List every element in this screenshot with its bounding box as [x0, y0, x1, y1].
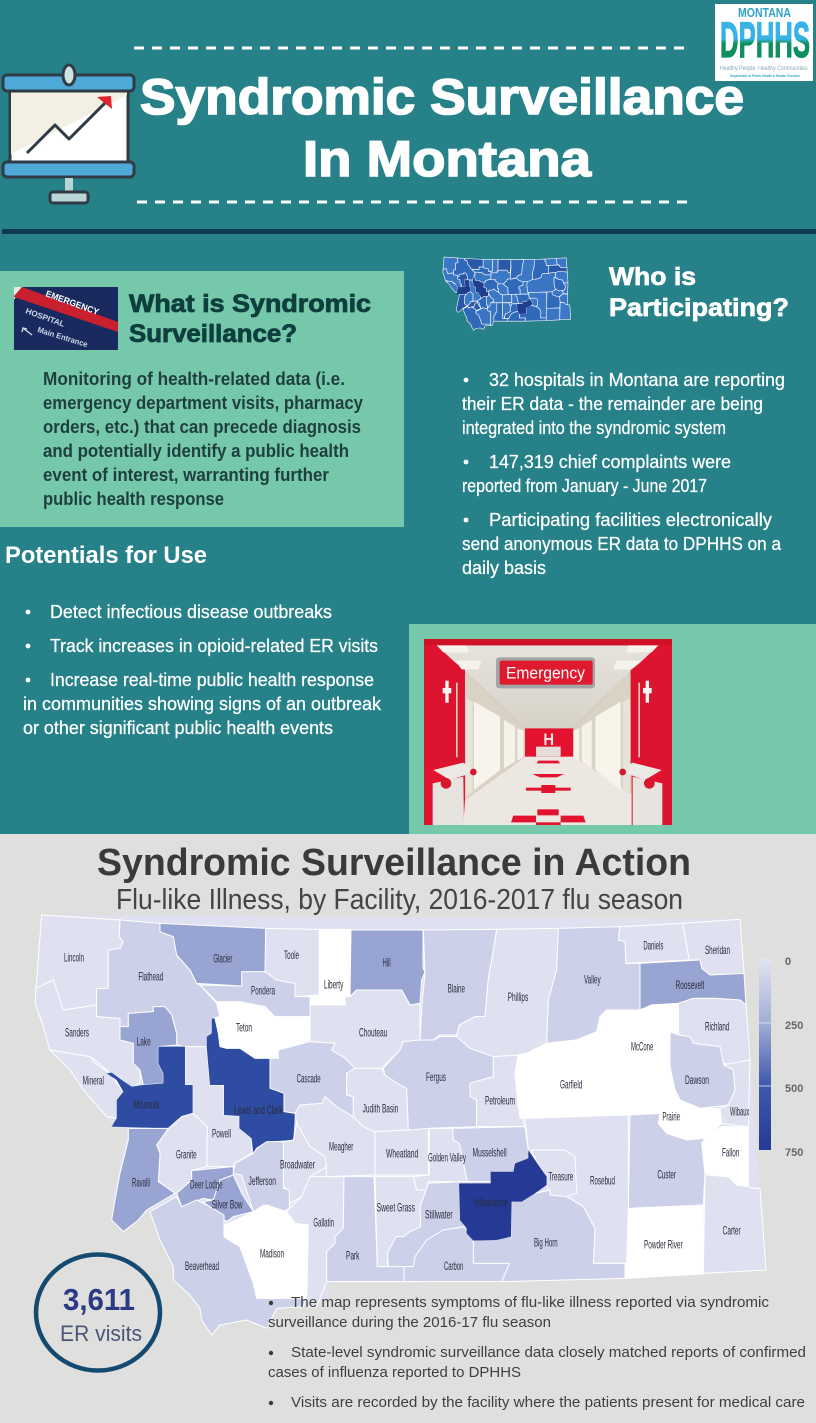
potentials bullets: or other significant public health events: [23, 718, 333, 738]
county labels: Glacier: [213, 953, 232, 966]
county labels: Liberty: [324, 979, 343, 992]
county labels: Richland: [705, 1021, 729, 1034]
definition text: event of interest, warranting further: [43, 465, 329, 485]
panel: emergency photo background: [409, 624, 816, 834]
county labels: Garfield: [560, 1079, 582, 1092]
county labels: Prairie: [662, 1111, 680, 1124]
map legend: 250: [785, 1020, 803, 1032]
county labels: Ravalli: [132, 1177, 150, 1190]
county labels: Valley: [584, 973, 601, 986]
title: [140, 69, 744, 187]
county labels: [64, 939, 749, 1273]
definition text: public health response: [43, 489, 224, 509]
county labels: Gallatin: [313, 1217, 334, 1230]
participation bullets: 32 hospitals in Montana are reporting: [489, 370, 785, 390]
logo: Montana DPHHS: [715, 4, 813, 81]
callout: 3,611 ER visits: ER visits: [60, 1321, 142, 1346]
county labels: Carter: [723, 1224, 741, 1237]
county labels: Granite: [176, 1148, 197, 1161]
participation bullets: reported from January - June 2017: [462, 476, 707, 496]
heading: what is syndromic surveillance: Surveillance?: [129, 320, 297, 348]
county labels: Wheatland: [386, 1148, 418, 1161]
heading: who is participating: Who is: [609, 263, 696, 291]
map notes bullets: surveillance during the 2016-17 flu season: [268, 1314, 551, 1331]
county labels: Deer Lodge: [190, 1178, 223, 1191]
county labels: Pondera: [251, 985, 275, 998]
definition text: [43, 369, 363, 509]
potentials bullets: [23, 602, 382, 738]
map legend: 500: [785, 1083, 803, 1095]
icon: presentation board with rising arrow: [3, 65, 134, 203]
heading: potentials for use: Potentials for Use: [5, 542, 207, 569]
callout: 3,611 ER visits: 3,611: [63, 1282, 135, 1317]
panel: what is syndromic surveillance: [0, 271, 404, 527]
county labels: Fallon: [722, 1147, 739, 1160]
participation bullets: integrated into the syndromic system: [462, 418, 726, 438]
participation bullets: their ER data - the remainder are being: [462, 394, 763, 414]
county labels: Lewis and Clark: [234, 1104, 283, 1117]
county labels: Jefferson: [248, 1175, 276, 1188]
heading: who is participating: [609, 263, 789, 322]
definition text: Monitoring of health-related data (i.e.: [43, 369, 345, 389]
county labels: Petroleum: [485, 1094, 515, 1107]
heading: who is participating: Participating?: [609, 294, 789, 322]
county labels: Missoula: [133, 1098, 160, 1111]
county labels: Toole: [284, 949, 299, 962]
choropleth map: Montana counties: [35, 915, 766, 1335]
choropleth map: Montana counties: Wibaux: [730, 1106, 749, 1119]
image: hospital emergency sign: EMERGENCY: [44, 288, 100, 317]
section subheading: Flu-like Illness, by Facility, 2016-2017 flu season: [116, 884, 683, 916]
heading: what is syndromic surveillance: [129, 290, 371, 348]
county labels: Stillwater: [425, 1208, 453, 1221]
county labels: Silver Bow: [212, 1198, 243, 1211]
county labels: Chouteau: [359, 1027, 387, 1040]
county labels: McCone: [631, 1041, 653, 1054]
section background: gray map area: [0, 834, 816, 1423]
top dashed rule: [134, 46, 685, 50]
map legend: 0: [785, 956, 791, 968]
county labels: Sanders: [65, 1027, 89, 1040]
county labels: Madison: [260, 1247, 284, 1260]
image: hospital emergency sign: [14, 287, 118, 350]
county labels: Golden Valley: [428, 1152, 466, 1165]
county labels: Big Horn: [534, 1237, 558, 1250]
participation bullets: Participating facilities electronically: [489, 510, 772, 530]
map notes bullets: State-level syndromic surveillance data closely matched reports of confirmed: [291, 1344, 806, 1361]
map legend: [759, 956, 803, 1159]
county labels: Sweet Grass: [377, 1202, 415, 1215]
image: hospital emergency sign: HOSPITAL: [24, 306, 66, 329]
county labels: Powder River: [644, 1238, 683, 1251]
heading: what is syndromic surveillance: What is Syndromic: [129, 290, 371, 318]
image: emergency corridor: Emergency: [506, 663, 586, 682]
definition text: orders, etc.) that can precede diagnosis: [43, 417, 361, 437]
map legend: 750: [785, 1147, 803, 1159]
county labels: Musselshell: [473, 1147, 507, 1160]
logo: Montana DPHHS: MONTANA: [738, 6, 791, 20]
participation bullets: 147,319 chief complaints were: [489, 452, 731, 472]
county labels: Mineral: [83, 1074, 104, 1087]
image: emergency corridor: H: [543, 730, 554, 749]
definition text: emergency department visits, pharmacy: [43, 393, 363, 413]
potentials bullets: Detect infectious disease outbreaks: [50, 602, 332, 622]
participation bullets: [462, 370, 785, 578]
map notes bullets: cases of influenza reported to DPHHS: [268, 1364, 521, 1381]
county labels: Judith Basin: [363, 1103, 398, 1116]
county labels: Cascade: [297, 1073, 321, 1086]
county labels: Rosebud: [590, 1174, 615, 1187]
participation bullets: daily basis: [462, 558, 546, 578]
callout: 3,611 ER visits: [36, 1254, 160, 1370]
county labels: Daniels: [643, 939, 663, 952]
title: In Montana: [303, 131, 592, 187]
image: hospital emergency sign: Main Entrance: [36, 325, 89, 349]
county labels: Dawson: [685, 1074, 709, 1087]
small Montana county map: [443, 257, 571, 331]
potentials bullets: Track increases in opioid-related ER visits: [50, 636, 378, 656]
county labels: Powell: [212, 1127, 231, 1140]
map notes bullets: The map represents symptoms of flu-like illness reported via syndromic: [291, 1294, 769, 1311]
potentials bullets: Increase real-time public health response: [50, 670, 374, 690]
bottom dashed rule: [137, 200, 687, 204]
page background: teal: [0, 0, 816, 836]
potentials bullets: in communities showing signs of an outbreak: [23, 694, 382, 714]
county labels: Broadwater: [280, 1158, 315, 1171]
section heading: syndromic surveillance in action: Syndromic Surveillance in Action: [97, 842, 691, 884]
county labels: Sheridan: [705, 944, 730, 957]
county labels: Custer: [657, 1169, 676, 1182]
map notes bullets: Visits are recorded by the facility where the patients present for medical care: [291, 1394, 805, 1411]
county labels: Hill: [383, 957, 391, 970]
title: Syndromic Surveillance: [140, 69, 744, 125]
county labels: Carbon: [444, 1260, 463, 1273]
county labels: Flathead: [138, 971, 163, 984]
image: emergency corridor: [424, 639, 672, 825]
county labels: Meagher: [329, 1141, 353, 1154]
county labels: Roosevelt: [676, 979, 705, 992]
county labels: Lincoln: [64, 952, 84, 965]
definition text: and potentially identify a public health: [43, 441, 349, 461]
county labels: Fergus: [426, 1071, 446, 1084]
county labels: Lake: [137, 1036, 151, 1049]
county labels: Treasure: [548, 1171, 573, 1184]
header divider bar: [2, 229, 816, 234]
county labels: Teton: [236, 1022, 252, 1035]
county labels: Phillips: [508, 991, 528, 1004]
county labels: Blaine: [448, 983, 465, 996]
county labels: Beaverhead: [185, 1260, 219, 1273]
participation bullets: send anonymous ER data to DPHHS on a: [462, 534, 782, 554]
county labels: Yellowstone: [473, 1197, 508, 1210]
map notes bullets: [268, 1294, 806, 1411]
county labels: Park: [346, 1249, 359, 1262]
